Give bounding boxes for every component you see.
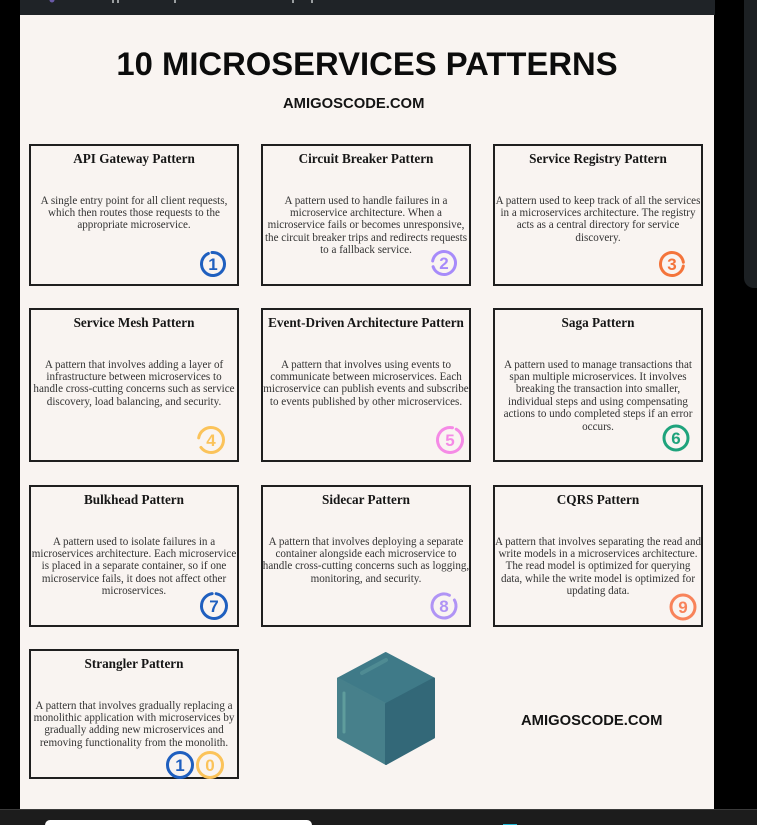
description: individual steps and using compensating [508,396,688,408]
icon: number 10: 0 [205,756,215,775]
brand label: AMIGOSCODE.COM [521,712,662,728]
icon: teal cube [337,652,435,765]
description: removing functionality from the monolith. [40,737,228,749]
panel: CQRS Pattern [493,485,703,627]
subtitle: AMIGOSCODE.COM [283,96,424,112]
description [496,194,700,244]
icon: number 6: 6 [671,429,681,448]
description: monitoring, and security. [311,573,421,585]
description: microservice architecture. When a [290,207,442,219]
description: microservices architecture. Each microservice [32,548,236,560]
description [265,194,467,256]
panel: Service Registry Pattern [493,144,703,286]
description: A pattern that involves separating the read and [495,536,701,548]
description: A pattern used to handle failures in a [285,194,447,206]
description: to events published by other microservices. [270,396,462,408]
heading: Bulkhead Pattern [84,492,184,507]
heading: Service Registry Pattern [529,151,667,166]
description [495,536,701,597]
title: 10 MICROSERVICES PATTERNS [116,45,618,82]
description: discovery, load balancing, and security. [47,396,221,408]
description: A pattern that involves gradually replacing a [35,700,233,712]
description: discovery. [575,232,621,244]
icon: number 3: 3 [667,255,677,274]
description: handle cross-cutting concerns such as logging, [263,560,469,572]
heading: Strangler Pattern [84,656,184,671]
icon: number 9 [670,594,696,620]
heading: Service Mesh Pattern [74,315,194,330]
description: A pattern that involves deploying a separate [269,536,463,548]
icon: number 9: 9 [678,598,688,617]
bottom dark bar [0,809,757,825]
description: to a fallback service. [320,244,412,256]
icon: number 2 [431,250,457,276]
description: is placed in a separate container, so if one [42,560,226,572]
bottom white pill [45,820,312,825]
description: microservices. [102,585,166,597]
description [263,358,469,408]
description: microservice fails or becomes unresponsive, [268,219,464,231]
description [34,700,234,749]
icon: number 10 [166,751,224,779]
icon: number 8: 8 [439,597,449,616]
description: in a microservices architecture. The registry [500,207,696,219]
icon: number 10: 1 [175,756,185,775]
description: A pattern used to keep track of all the services [496,194,700,206]
icon: number 5 [436,426,464,454]
panel: Service Mesh Pattern [29,308,239,462]
description: the circuit breaker trips and redirects requests [265,232,467,244]
heading: Circuit Breaker Pattern [299,151,433,166]
panel: Event-Driven Architecture Pattern [261,308,471,462]
icon: number 6 [662,424,690,452]
description: data, while the write model is optimized for [501,573,695,585]
description: updating data. [567,585,629,597]
description: infrastructure between microservices to [46,371,222,383]
description: gradually adding new microservices and [44,724,224,736]
panel: Circuit Breaker Pattern [261,144,471,286]
description: A pattern used to isolate failures in a [53,536,215,548]
panel: Sidecar Pattern [261,485,471,627]
description: microservice can publish events and subscribe [263,383,469,395]
description: A pattern that involves adding a layer of [45,358,223,370]
description [263,536,469,585]
icon: number 5: 5 [445,431,455,450]
icon: number 1 [200,251,226,277]
description: breaking the transaction into smaller, [516,383,680,395]
heading: API Gateway Pattern [73,151,195,166]
description: communicate between microservices. Each [270,371,462,383]
description: appropriate microservice. [77,219,191,231]
description: actions to undo completed steps if an error [504,408,692,420]
icon: number 7: 7 [209,597,219,616]
description [40,194,227,231]
icon: number 3 [659,251,685,277]
heading: Event-Driven Architecture Pattern [268,315,464,330]
bottom cyan indicator [503,824,517,825]
description: which then routes those requests to the [48,207,220,219]
description [32,536,236,597]
description: monolithic application with microservices by [34,712,234,724]
heading: Saga Pattern [562,315,634,330]
cropped caption fragments in top bar [50,0,313,3]
icon: number 2: 2 [439,254,449,273]
description: microservice fails, it does not affect other [42,573,226,585]
description: occurs. [582,421,614,433]
description: acts as a central directory for service [517,219,679,231]
icon: number 8 [430,592,458,620]
icon: number 7 [200,592,228,620]
description: A single entry point for all client requests, [41,194,227,206]
description [33,358,235,408]
top dark bar [20,0,715,15]
panel: Bulkhead Pattern [29,485,239,627]
right side dark panel [744,0,757,288]
description: container alongside each microservice to [275,548,457,560]
icon: number 1: 1 [208,255,218,274]
description: write models in a microservices architecture. [498,548,698,560]
heading: CQRS Pattern [557,492,639,507]
description [504,358,692,433]
panel: Strangler Pattern [29,649,239,779]
description: span multiple microservices. It involves [509,371,687,383]
description: A pattern that involves using events to [281,358,451,370]
description: handle cross-cutting concerns such as service [33,383,235,395]
panel: API Gateway Pattern [29,144,239,286]
icon: number 4: 4 [206,431,216,450]
description: The read model is optimized for querying [506,560,690,572]
heading: Sidecar Pattern [322,492,410,507]
panel: Saga Pattern [493,308,703,462]
description: A pattern used to manage transactions that [504,358,692,370]
icon: number 4 [197,426,225,454]
